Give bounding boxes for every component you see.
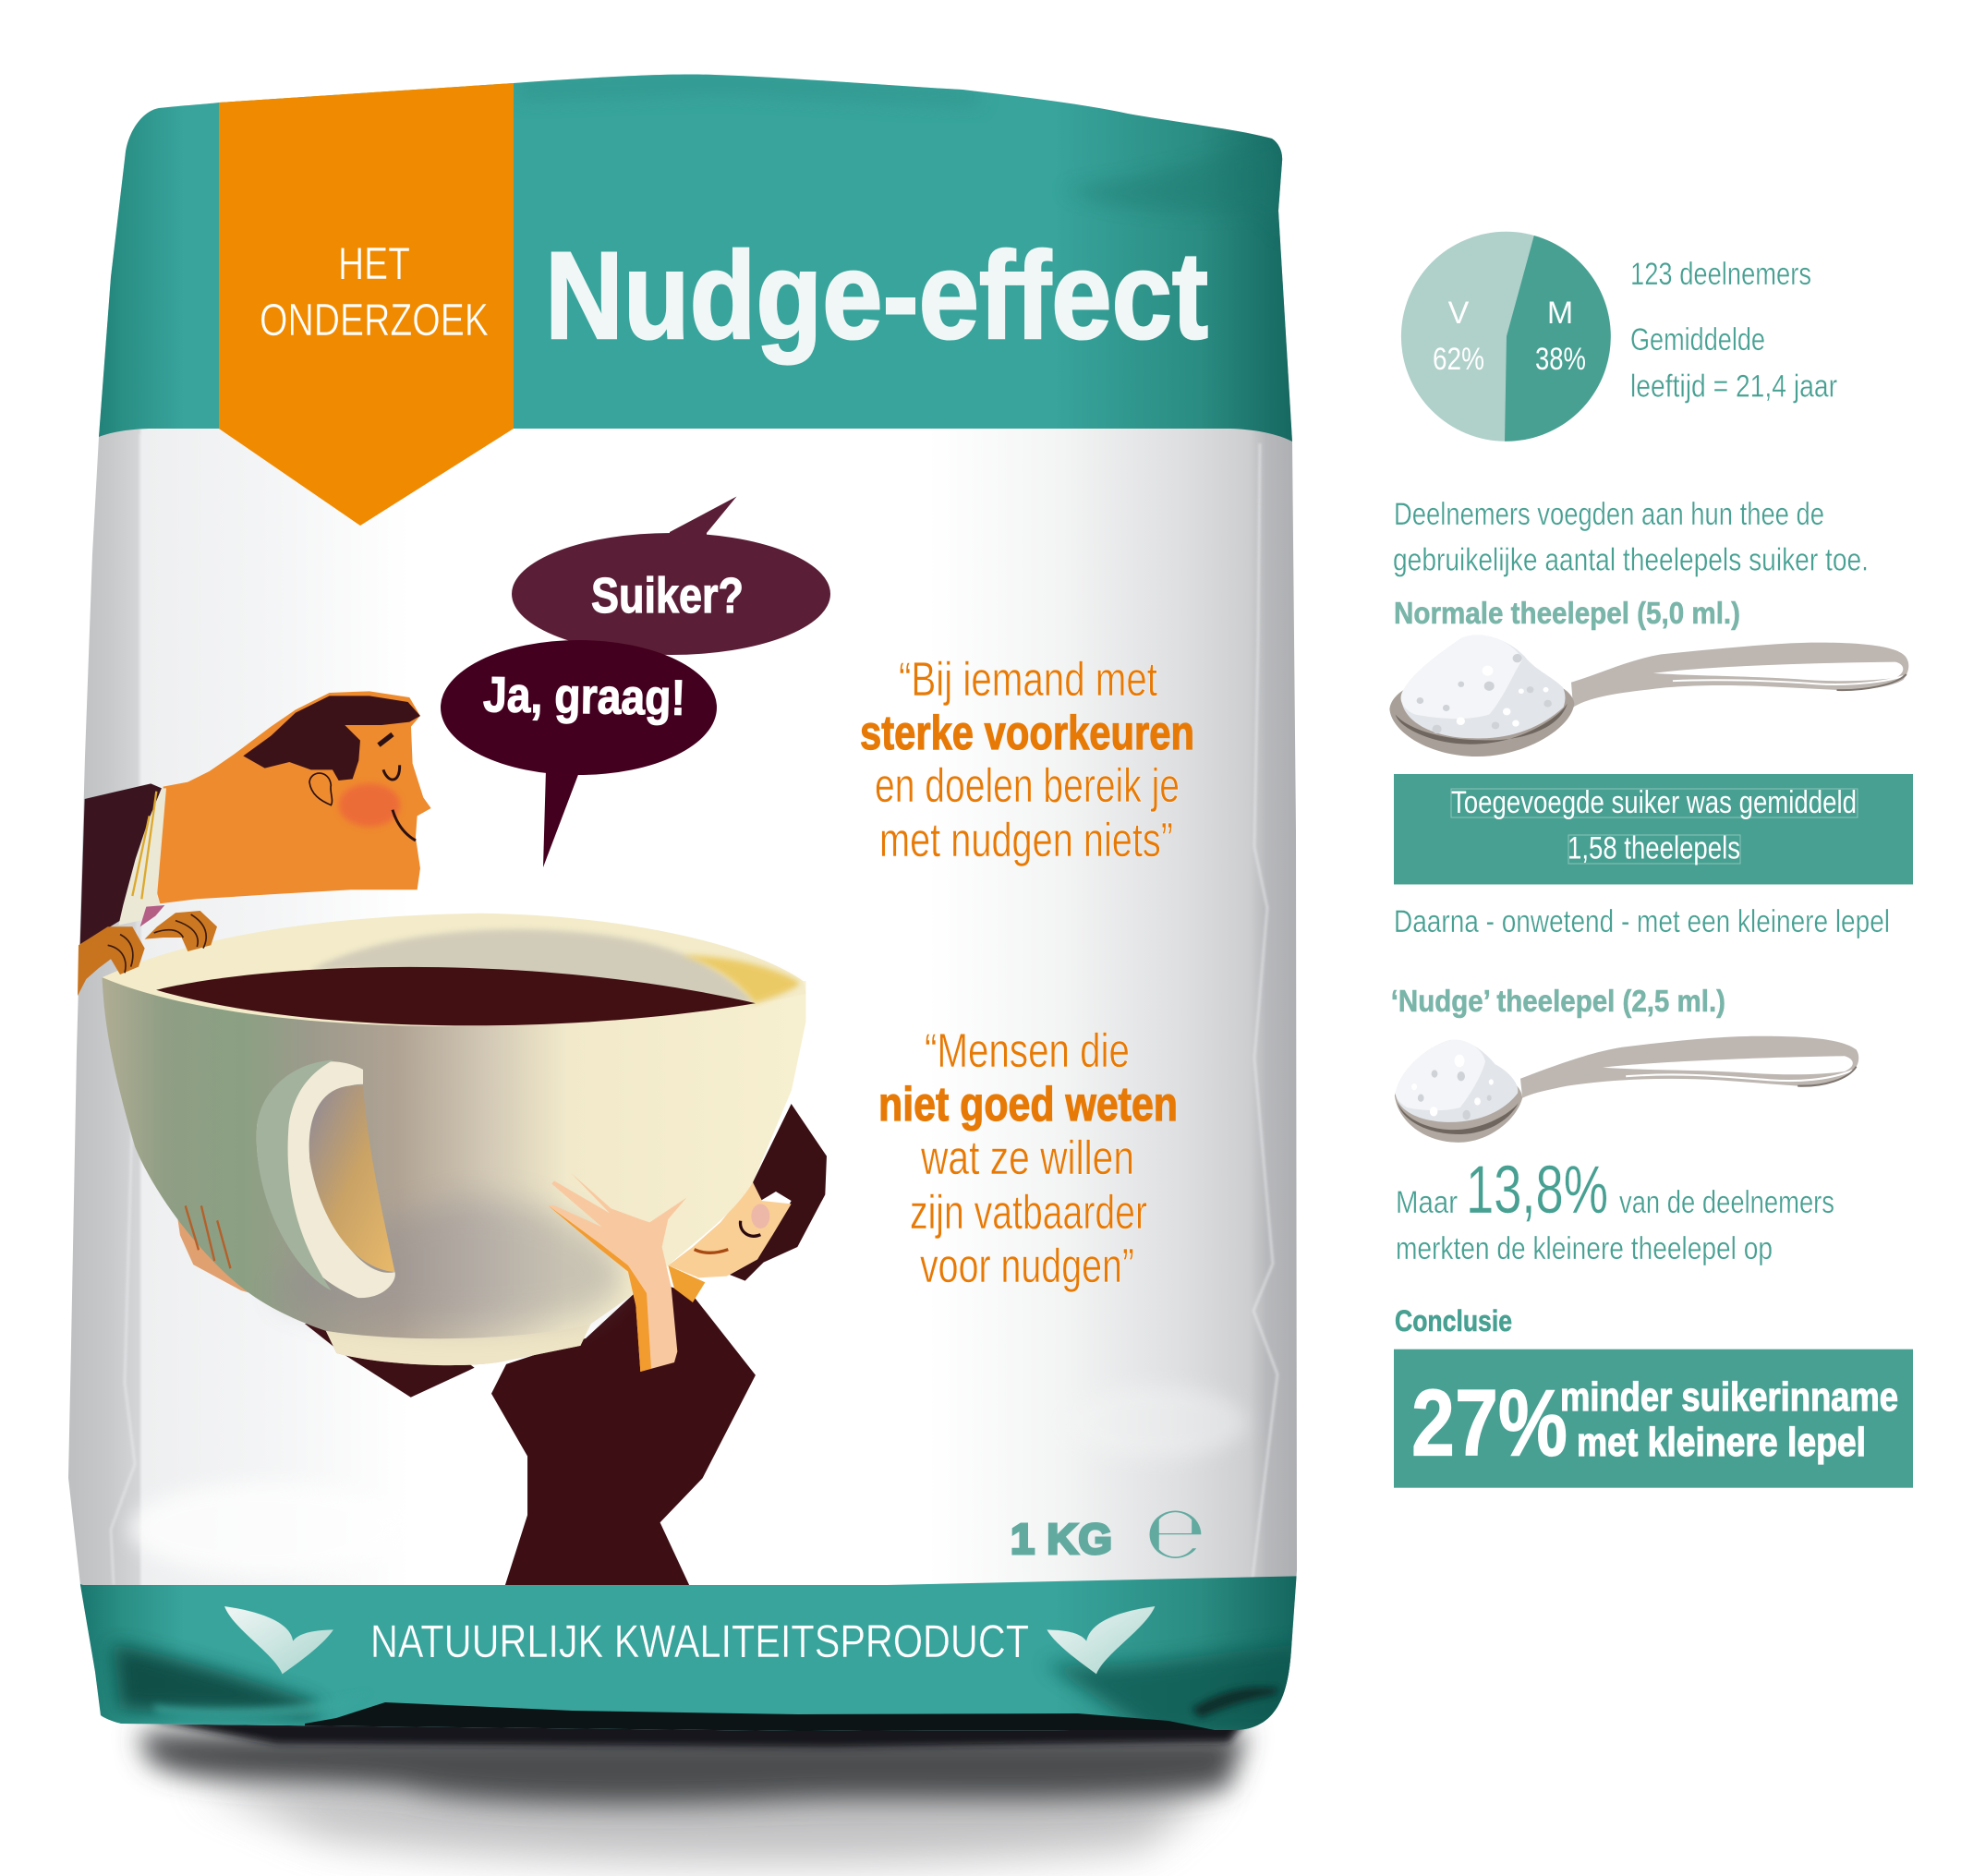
stat: 13,8% noticed: van de deelnemers — [1619, 1185, 1834, 1220]
participants facts: 123 deelnemers — [1630, 257, 1811, 292]
quote: sterke voorkeuren: sterke voorkeuren — [860, 707, 1194, 760]
heading: nudge teaspoon: ‘Nudge’ theelepel (2,5 ml.) — [1391, 984, 1725, 1018]
quote: sterke voorkeuren: met nudgen niets” — [879, 814, 1173, 867]
top teal band — [55, 55, 1312, 442]
speech bubble: suiker: Suiker? — [591, 568, 744, 623]
man's hands — [78, 926, 145, 996]
ribbon label: het onderzoek — [260, 239, 489, 345]
intro text: gebruikelijke aantal theelepels suiker toe. — [1393, 542, 1869, 577]
quote: sterke voorkeuren: en doelen bereik je — [875, 759, 1180, 813]
illustration: woman face and hair — [668, 1104, 827, 1302]
intro text — [1393, 497, 1869, 577]
cup body — [103, 977, 805, 1365]
icon: left leaves — [224, 1606, 333, 1674]
callout: average sugar added: 1,58 theelepels — [1568, 830, 1740, 865]
stat: 13,8% noticed — [1396, 1153, 1834, 1266]
callout: conclusion 27%: minder suikerinname — [1560, 1374, 1898, 1420]
icon: nudge spoon with sugar — [1395, 1036, 1858, 1143]
quote: niet goed weten: wat ze willen — [920, 1132, 1134, 1185]
pie chart: gender split: 38% — [1535, 342, 1586, 377]
sugar bag packaging — [55, 55, 1312, 1746]
cup rim — [103, 914, 805, 1026]
participants facts: Gemiddelde — [1630, 322, 1765, 357]
stat: 13,8% noticed: Maar — [1396, 1185, 1458, 1220]
ribbon label: het onderzoek: HET — [338, 239, 410, 289]
heading: normal teaspoon: Normale theelepel (5,0 ml.) — [1394, 596, 1740, 630]
quote: sterke voorkeuren — [860, 653, 1194, 867]
weight label: 1 KG — [1011, 1515, 1112, 1563]
pie chart: gender split: M — [1547, 296, 1573, 331]
quote: niet goed weten: voor nudgen” — [920, 1240, 1134, 1293]
man's face lines — [309, 734, 416, 841]
dark fold at bag base — [305, 1702, 1215, 1731]
orange ribbon — [219, 83, 514, 526]
speech bubble: ja graag — [441, 640, 717, 867]
man's hair — [243, 696, 420, 781]
participants facts: leeftijd = 21,4 jaar — [1630, 369, 1837, 405]
coffee — [156, 967, 756, 1025]
lower hand finger lines — [186, 1205, 230, 1268]
estimated sign: ℮ — [1145, 1492, 1205, 1575]
illustration: man leaning over cup — [78, 691, 431, 996]
bottom teal band — [79, 1576, 1297, 1731]
callout: average sugar added: Toegevoegde suiker was gemiddeld — [1451, 785, 1857, 820]
illustration: woman hand on cup — [548, 1173, 686, 1372]
callout: conclusion 27%: met kleinere lepel — [1577, 1420, 1866, 1465]
stat: 13,8% noticed: merkten de kleinere theelepel op — [1396, 1231, 1773, 1266]
illustration: coffee cup — [103, 914, 805, 1365]
cup foot — [326, 1325, 588, 1365]
man's head — [157, 691, 431, 903]
title: Nudge-effect — [545, 227, 1208, 365]
man's shirt cuff — [118, 788, 166, 926]
speech bubble: ja graag: Ja, graag! — [483, 667, 686, 726]
pie chart: gender split: V — [1448, 296, 1470, 331]
quote: sterke voorkeuren: “Bij iemand met — [899, 653, 1157, 707]
speech bubble: suiker — [512, 497, 830, 655]
icon: normal spoon with sugar — [1389, 635, 1908, 756]
quote: niet goed weten — [878, 1024, 1178, 1293]
quote: niet goed weten: “Mensen die — [925, 1024, 1130, 1078]
quote: niet goed weten: niet goed weten — [878, 1078, 1178, 1132]
man's jacket — [80, 783, 162, 945]
bottom slogan: NATUURLIJK KWALITEITSPRODUCT — [370, 1616, 1029, 1667]
callout: conclusion 27% — [1394, 1350, 1913, 1488]
pie chart: gender split: 62% — [1433, 342, 1484, 377]
pie chart: gender split — [1401, 232, 1611, 442]
participants facts — [1630, 257, 1837, 405]
ground shadow under bag — [139, 1720, 1247, 1864]
ribbon label: het onderzoek: ONDERZOEK — [260, 296, 489, 345]
cup handle — [257, 1059, 395, 1298]
callout: conclusion 27%: 27% — [1411, 1371, 1568, 1476]
intro text: Deelnemers voegden aan hun thee de — [1394, 497, 1824, 532]
quote: niet goed weten: zijn vatbaarder — [910, 1186, 1147, 1240]
heading: conclusion: Conclusie — [1395, 1304, 1512, 1337]
illustration: woman body behind cup — [175, 1198, 756, 1585]
stat: 13,8% noticed: 13,8% — [1466, 1153, 1608, 1228]
callout: average sugar added — [1394, 774, 1913, 885]
icon: right leaves — [1047, 1606, 1155, 1674]
